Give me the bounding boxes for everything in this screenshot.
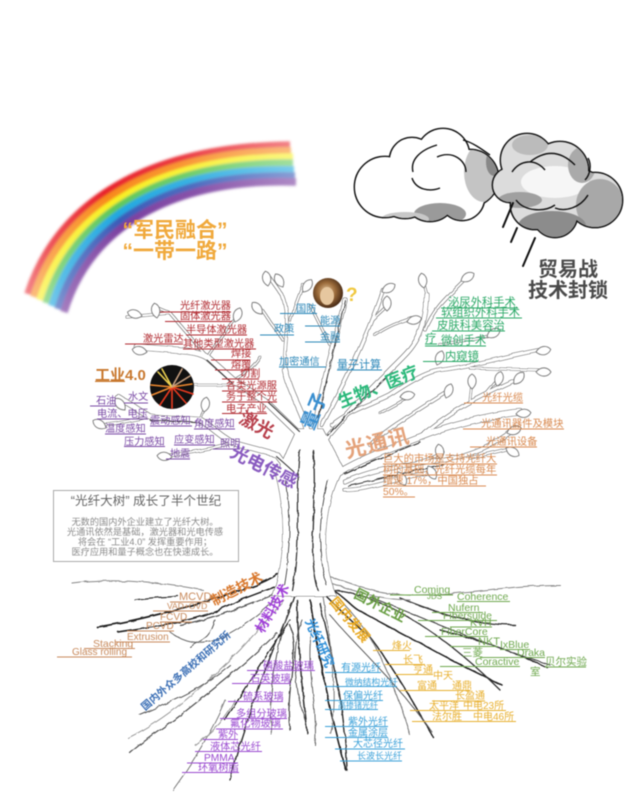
- labels: laser branch: 切割: [240, 367, 260, 380]
- root title: foreign companies: 国外企业: [352, 585, 409, 625]
- tree leaves: [91, 270, 551, 487]
- labels: photoelectric sensing branch: 压力感知: [124, 435, 165, 448]
- labels: optical communication branch: 光纤光缆: [482, 391, 523, 404]
- labels: domestic companies: 中电46所: [473, 710, 514, 723]
- text block: market note: 增速 17%，中国独占: [383, 474, 479, 487]
- labels: foreign companies: JDS: [427, 592, 442, 601]
- rain strokes: [503, 203, 535, 266]
- labels: fiber research: 金属涂层: [348, 726, 388, 739]
- labels: materials technology: 石英玻璃: [250, 672, 291, 685]
- labels: domestic companies: 长盈通: [455, 690, 485, 702]
- labels: manufacturing technology: MCVD: [179, 591, 211, 603]
- labels: domestic companies: 太平洋: [429, 699, 459, 712]
- heading: trade war, technology blockade: 贸易战: [538, 258, 598, 281]
- labels: defence, energy, finance, quantum: 国防: [296, 302, 316, 315]
- labels: materials technology: [182, 659, 315, 774]
- root title: domestic development: 国内发展: [327, 594, 374, 646]
- icon: light burst for Industry 4.0: [150, 365, 194, 409]
- root title: manufacturing technology: 制造技术: [208, 569, 265, 609]
- labels: domestic companies: 长飞: [403, 654, 423, 666]
- labels: biomedical branch: [423, 295, 522, 363]
- labels: fiber research: 紫外光纤: [348, 715, 388, 728]
- labels: fiber research: [325, 661, 405, 761]
- labels: optical communication branch: 光通讯设备: [486, 435, 538, 448]
- branch title: quantum: 量子: [297, 389, 332, 433]
- branch title: biology and medicine: 生物、医疗: [335, 361, 421, 412]
- panel text: 将会在 “工业4.0” 发挥重要作用；: [78, 536, 212, 547]
- rainbow: [28, 145, 296, 312]
- heading: Industry 4.0: 工业4.0: [95, 367, 146, 384]
- labels: photoelectric sensing branch: 温度感知: [105, 422, 146, 435]
- text block: market note: 巨大的市场是支持光纤大: [383, 452, 496, 465]
- labels: laser branch: 熔覆: [231, 358, 251, 371]
- icon: storm clouds: [355, 129, 624, 266]
- labels: laser branch: [125, 299, 277, 415]
- labels: foreign companies: 贝尔实验: [545, 655, 587, 668]
- labels: manufacturing technology: VAD+OVD: [167, 601, 207, 611]
- labels: fiber research: 大芯径光纤: [353, 737, 403, 750]
- labels: fiber research: 有源光纤: [341, 661, 381, 674]
- labels: foreign companies: 三菱: [462, 647, 483, 659]
- labels: manufacturing technology: Extrusion: [127, 632, 169, 643]
- labels: foreign companies: Coming: [414, 584, 450, 596]
- labels: fiber research: 长波长光纤: [357, 750, 402, 761]
- icon: portrait with question mark: ?: [346, 285, 358, 306]
- labels: defence, energy, finance, quantum: 政策: [274, 322, 294, 335]
- labels: manufacturing technology: Stacking: [93, 638, 133, 650]
- labels: foreign companies: Coractive: [475, 656, 520, 668]
- labels: biomedical branch: 皮肤科美容治: [437, 318, 505, 332]
- icon: portrait with question mark: [313, 278, 358, 308]
- labels: materials technology: 紫外: [218, 729, 238, 741]
- labels: defence, energy, finance, quantum: 能源: [320, 314, 340, 327]
- text block: market note: [383, 452, 497, 498]
- root title: fiber research: 光纤研究: [302, 616, 337, 670]
- labels: photoelectric sensing branch: 水文: [128, 390, 148, 403]
- labels: foreign companies: 室: [530, 665, 540, 678]
- right cloud: [493, 134, 624, 241]
- labels: defence, energy, finance, quantum: [260, 302, 382, 371]
- labels: manufacturing technology: FCVD: [160, 612, 187, 623]
- labels: laser branch: 激光雷达: [143, 332, 184, 345]
- labels: domestic companies: [373, 639, 516, 723]
- labels: optical communication branch: 光通讯器件及模块: [481, 417, 563, 430]
- tree sketch shading: [150, 300, 445, 590]
- labels: fiber research: 保偏光纤: [343, 689, 383, 702]
- labels: foreign companies: Nufern: [448, 602, 480, 614]
- labels: domestic companies: 烽火: [392, 639, 412, 652]
- panel text: 医疗应用和量子概念也在快速成长。: [72, 546, 218, 557]
- labels: laser branch: 焊接: [231, 347, 251, 360]
- labels: laser branch: 电子产业: [226, 402, 267, 415]
- labels: foreign companies: Coherence: [457, 591, 509, 603]
- labels: foreign companies: IxBlue: [500, 639, 529, 651]
- slogan: military-civil integration, belt and road: “军民融合”: [122, 219, 228, 242]
- tree roots: [72, 570, 560, 790]
- text block: market note: 树的基础，光纤光缆每年: [383, 463, 496, 476]
- tree limbs and trunk: [97, 277, 540, 595]
- labels: materials technology: 氟化物玻璃: [230, 717, 281, 730]
- labels: laser branch: 其他类型激光器: [183, 337, 254, 350]
- labels: domestic companies: 亨通: [413, 663, 433, 676]
- branch title: optical communication: 光通讯: [343, 425, 412, 463]
- labels: biomedical branch: 软组织外科手术: [441, 305, 520, 319]
- labels: biomedical branch: 疗: [425, 331, 436, 345]
- labels: foreign companies: [390, 584, 587, 678]
- labels: domestic companies: 富通: [417, 679, 437, 692]
- labels: photoelectric sensing branch: 地震: [170, 447, 190, 460]
- slogan: military-civil integration, belt and road: [122, 219, 228, 263]
- labels: photoelectric sensing branch: 应变感知: [174, 433, 215, 446]
- labels: photoelectric sensing branch: [90, 390, 240, 460]
- labels: laser branch: 光纤激光器: [180, 299, 231, 312]
- panel text: [67, 516, 223, 557]
- labels: materials technology: 液体芯光纤: [210, 740, 261, 753]
- labels: biomedical branch: 泌尿外科手术: [448, 295, 516, 309]
- left cloud: [355, 129, 504, 226]
- labels: domestic companies: 中天: [433, 669, 453, 682]
- labels: foreign companies: Fibersuide: [443, 610, 492, 622]
- branch title: photoelectric sensing: 光电传感: [227, 442, 300, 492]
- labels: fiber research: 微纳结构光纤: [345, 676, 398, 687]
- labels: optical communication branch: [463, 391, 564, 448]
- labels: defence, energy, finance, quantum: 金融: [320, 330, 340, 343]
- labels: photoelectric sensing branch: 电流、电压: [97, 407, 148, 420]
- labels: photoelectric sensing branch: 照明: [220, 438, 240, 450]
- labels: domestic companies: 法尔胜: [432, 710, 462, 723]
- labels: photoelectric sensing branch: 角度感知: [194, 417, 235, 430]
- labels: foreign companies: Draka: [517, 647, 545, 659]
- labels: materials technology: 磷酸盐玻璃: [263, 659, 314, 672]
- root title: materials technology: 材料技术: [252, 580, 293, 636]
- labels: manufacturing technology: [57, 591, 211, 658]
- labels: laser branch: 半导体激光器: [186, 323, 247, 336]
- labels: biomedical branch: 内窥镜: [445, 349, 479, 363]
- panel: fiber tree summary: [54, 490, 238, 562]
- heading: trade war, technology blockade: 技术封锁: [528, 279, 608, 302]
- labels: foreign companies: NKT: [478, 636, 500, 648]
- labels: photoelectric sensing branch: 石油: [96, 394, 116, 407]
- trunk: [274, 430, 342, 595]
- labels: laser branch: 务于整个光: [226, 390, 277, 403]
- labels: biomedical branch: 微创手术: [441, 333, 486, 347]
- branch title: laser: 激光: [236, 408, 277, 442]
- labels: laser branch: 各类光源服: [226, 379, 277, 392]
- labels: photoelectric sensing branch: 震动感知: [150, 414, 191, 427]
- labels: materials technology: 多组分玻璃: [236, 707, 287, 720]
- panel text: 光通讯依然是基础，激光器和光电传感: [67, 526, 223, 537]
- labels: domestic companies: 通鼎: [452, 680, 472, 692]
- labels: defence, energy, finance, quantum: 量子计算: [337, 357, 381, 371]
- labels: manufacturing technology: Glass rolling: [72, 647, 127, 658]
- labels: foreign companies: KVH: [470, 617, 492, 629]
- labels: materials technology: PMMA: [204, 753, 235, 764]
- labels: materials technology: 环氧树脂: [198, 761, 239, 774]
- labels: manufacturing technology: PCVD: [146, 621, 174, 632]
- panel text: 无数的国内外企业建立了光纤大树。: [72, 516, 218, 527]
- labels: foreign companies: FiberCore: [441, 626, 488, 638]
- labels: fiber research: 高掺锗光纤: [338, 700, 378, 710]
- labels: domestic companies: 中电23所: [463, 699, 504, 712]
- root title: universities and institutes: 国内外众多高校和研究所: [138, 628, 234, 713]
- heading: trade war, technology blockade: [528, 258, 608, 302]
- labels: defence, energy, finance, quantum: 加密通信: [279, 355, 320, 368]
- labels: laser branch: 固体激光器: [180, 310, 231, 322]
- slogan: military-civil integration, belt and road: “一带一路”: [122, 240, 228, 263]
- text block: market note: 50%。: [383, 487, 414, 498]
- labels: materials technology: 硫系玻璃: [243, 690, 284, 703]
- panel heading: “光纤大树” 成长了半个世纪: [71, 493, 222, 508]
